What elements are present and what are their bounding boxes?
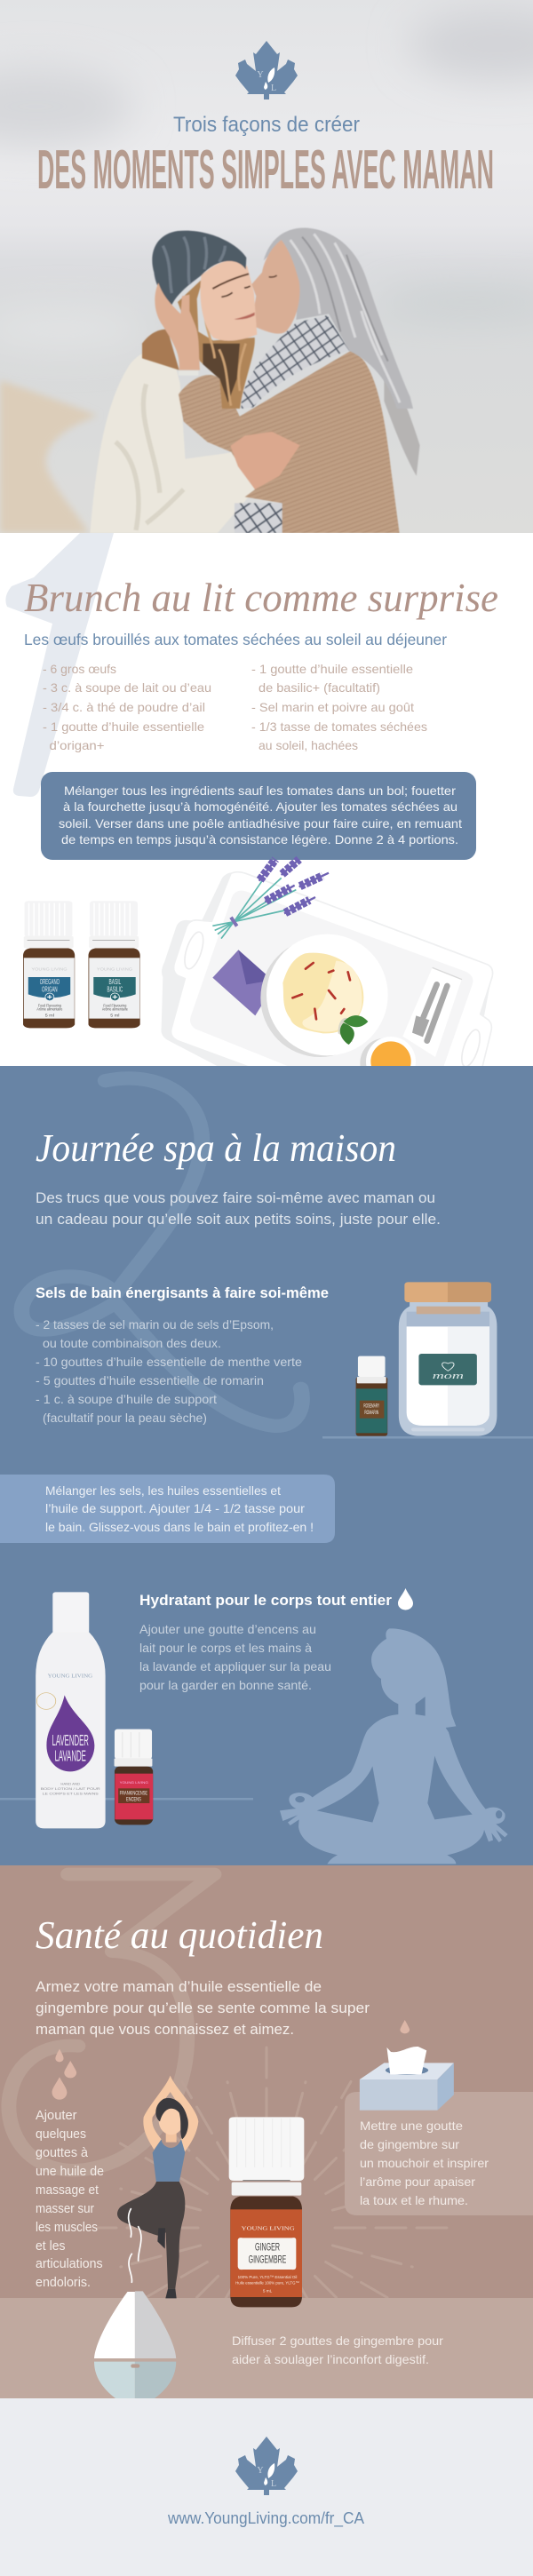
bath salt ingredients: - 2 tasses de sel marin ou de sels d’Epsom, <box>36 1317 274 1332</box>
watermark number 3 <box>9 1874 214 2170</box>
product: lavender lotion: LAVANDE <box>55 1747 86 1765</box>
product: ginger bottle <box>229 2117 304 2307</box>
subheading: moisturizer: Hydratant pour le corps tout entier <box>139 1592 392 1609</box>
icon: water drop <box>398 1588 413 1610</box>
logo: maple leaf top: L <box>271 83 276 93</box>
massage text <box>36 2109 104 2290</box>
shelf line <box>322 1436 533 1439</box>
product: lavender lotion: BODY LOTION / LAIT POUR <box>41 1786 100 1791</box>
website url: www.YoungLiving.com/fr_CA <box>167 2509 364 2528</box>
moisturizer text: la lavande et appliquer sur la peau <box>139 1659 331 1674</box>
ingredients right: de basilic+ (facultatif) <box>259 680 380 695</box>
moisturizer text: pour la garder en bonne santé. <box>139 1678 312 1692</box>
tissue text: l’arôme pour apaiser <box>360 2174 475 2189</box>
intro text <box>36 1979 370 2038</box>
logo: maple leaf top <box>235 41 298 99</box>
ingredients left: - 3 c. à soupe de lait ou d’eau <box>43 680 211 695</box>
silhouette: meditating woman <box>280 1628 508 1864</box>
tissue text <box>360 2119 489 2207</box>
ingredients right: - Sel marin et poivre au goût <box>251 700 414 714</box>
illustration: yoga woman <box>117 2076 198 2298</box>
panel: footer <box>0 2398 533 2576</box>
ingredients right: - 1 goutte d’huile essentielle <box>251 662 413 676</box>
massage text: gouttes à <box>36 2146 89 2160</box>
illustration: diffuser <box>94 2291 176 2398</box>
logo: maple leaf top: Y <box>257 70 264 80</box>
instructions box: Mélanger tous les ingrédients sauf les tomates dans un bol; fouetter <box>64 783 456 798</box>
diffuser text <box>232 2334 443 2366</box>
lavender bouquet <box>212 855 329 939</box>
ingredients left <box>43 662 211 752</box>
envelope <box>212 950 266 1016</box>
instructions box: bath salts <box>0 1475 335 1543</box>
panel: spa section <box>0 1066 533 1865</box>
product: oregano bottle: Arôme alimentaire <box>36 1007 63 1013</box>
tissue text: la toux et le rhume. <box>360 2193 468 2207</box>
diffuser text: aider à soulager l’inconfort digestif. <box>232 2352 429 2366</box>
intro text: Des trucs que vous pouvez faire soi-même avec maman ou <box>36 1190 435 1206</box>
ingredients right: au soleil, hachées <box>259 738 358 752</box>
photo: bodies <box>90 350 420 533</box>
product: rosemary bottle: ROSEMARY <box>363 1403 379 1410</box>
massage text: endoloris. <box>36 2276 91 2290</box>
product: basil bottle: 5 ml <box>110 1014 119 1019</box>
napkin and cutlery <box>402 967 462 1057</box>
massage text: Ajouter <box>36 2109 77 2123</box>
product: basil bottle: YOUNG LIVING <box>97 967 132 973</box>
ingredients left: - 1 goutte d’huile essentielle <box>43 720 204 734</box>
product: basil bottle: BASIL <box>108 978 121 986</box>
bath salt ingredients: - 10 gouttes d’huile essentielle de menthe verte <box>36 1355 302 1369</box>
product: oregano bottle: OREGANO <box>40 978 60 986</box>
intro text <box>36 1190 441 1228</box>
product: rosemary bottle <box>356 1356 387 1436</box>
tissue text: un mouchoir et inspirer <box>360 2156 489 2170</box>
sand beach <box>0 380 98 533</box>
massage text: massage et <box>36 2183 99 2198</box>
product: rosemary bottle: ROMARIN <box>364 1410 378 1416</box>
instructions box <box>41 772 476 860</box>
intro text: Armez votre maman d’huile essentielle de <box>36 1979 322 1995</box>
product: lavender lotion <box>36 1592 106 1828</box>
icon: tissue box <box>360 2047 454 2111</box>
intro text: un cadeau pour qu’elle soit aux petits soins, juste pour elle. <box>36 1212 441 1228</box>
product: ginger bottle: GINGER <box>255 2240 280 2253</box>
ingredients left: - 6 gros œufs <box>43 662 116 676</box>
lavender over box edge <box>260 859 299 880</box>
product: frankincense bottle <box>115 1729 153 1825</box>
diffuser text: Diffuser 2 gouttes de gingembre pour <box>232 2334 443 2348</box>
product: oregano bottle <box>23 901 75 1028</box>
product: oregano bottle: Food Flavouring <box>38 1004 61 1008</box>
heading: spa: Journée spa à la maison <box>36 1126 396 1170</box>
product: basil bottle: BASILIC <box>107 985 123 994</box>
ingredients left: d’origan+ <box>50 738 105 752</box>
heading: health: Santé au quotidien <box>36 1913 323 1957</box>
moisturizer text: Ajouter une goutte d’encens au <box>139 1622 316 1636</box>
photo: faces and hair <box>142 228 413 409</box>
bath salt ingredients: (facultatif pour la peau sèche) <box>43 1411 207 1425</box>
ingredients left: - 3/4 c. à thé de poudre d’ail <box>43 700 205 714</box>
intro text: maman que vous connaissez et aimez. <box>36 2022 294 2038</box>
product: ginger bottle: 5 mL <box>263 2288 273 2293</box>
icon: oil drops <box>52 2020 410 2100</box>
cup <box>360 1037 416 1066</box>
product: frankincense bottle: YOUNG LIVING <box>120 1780 149 1785</box>
logo: maple leaf bottom: L <box>271 2479 276 2489</box>
product: basil bottle: Food Flavouring <box>103 1004 127 1008</box>
product: oregano bottle: YOUNG LIVING <box>31 967 68 973</box>
product: ginger bottle: GINGEMBRE <box>249 2253 286 2265</box>
product: ginger bottle: 100% Pure, YLTG™ Essential Oil <box>238 2275 297 2279</box>
product: ginger bottle: Huile essentielle 100% pure, YLTG™ <box>235 2280 299 2285</box>
shelf line <box>0 1798 253 1800</box>
logo: maple leaf bottom <box>235 2437 298 2495</box>
massage text: quelques <box>36 2127 86 2142</box>
illustration: breakfast tray <box>162 860 494 1066</box>
illustration: salt jar <box>399 1282 497 1436</box>
plate with eggs <box>260 934 388 1057</box>
instructions box: à la fourchette jusqu’à homogénéité. Ajouter les tomates séchées au <box>63 799 457 814</box>
instructions box: de temps en temps jusqu’à consistance légère. Donne 2 à 4 portions. <box>61 832 458 847</box>
panel: brunch section <box>5 533 497 1066</box>
ingredients right: - 1/3 tasse de tomates séchées <box>251 720 427 734</box>
icon: diffuser steam <box>129 2209 141 2282</box>
massage text: articulations <box>36 2257 103 2271</box>
massage text: et les <box>36 2239 66 2254</box>
instructions box: bath salts: Mélanger les sels, les huiles essentielles et <box>45 1483 281 1498</box>
bath salt ingredients <box>36 1317 302 1425</box>
moisturizer text: lait pour le corps et les mains à <box>139 1641 312 1655</box>
product: lavender lotion: LE CORPS ET LES MAINS <box>43 1792 99 1795</box>
product: basil bottle <box>89 901 140 1028</box>
instructions box: soleil. Verser dans une poêle antiadhésive pour faire cuire, en remuant <box>59 816 462 831</box>
ingredients right <box>251 662 427 752</box>
subheading: bath salts: Sels de bain énergisants à faire soi-même <box>36 1285 329 1301</box>
bath salt ingredients: - 5 gouttes d’huile essentielle de romarin <box>36 1373 264 1387</box>
product: ginger bottle: YOUNG LIVING <box>242 2225 295 2231</box>
product: basil bottle: Arôme alimentaire <box>102 1007 128 1013</box>
tissue panel <box>345 2092 533 2215</box>
product: frankincense bottle: ENCENS <box>126 1797 141 1803</box>
decorative rays <box>96 2047 448 2298</box>
tissue text: de gingembre sur <box>360 2137 459 2151</box>
panel: daily health section <box>0 1865 533 2398</box>
logo: maple leaf bottom: Y <box>257 2466 264 2476</box>
product: lavender lotion: HAND AND <box>60 1782 80 1785</box>
massage text: les muscles <box>36 2221 98 2235</box>
tissue text: Mettre une goutte <box>360 2119 463 2133</box>
bath salt ingredients: ou toute combinaison des deux. <box>43 1336 221 1350</box>
watermark number 2 <box>21 1078 302 1426</box>
product: oregano bottle: 5 ml <box>45 1014 54 1019</box>
panel: hero photo <box>0 0 533 533</box>
product: lavender lotion: LAVENDER <box>52 1731 89 1750</box>
watermark number 1 <box>5 533 114 797</box>
product: oregano bottle: ORIGAN <box>42 985 58 994</box>
heading: brunch: Brunch au lit comme surprise <box>24 575 498 620</box>
subtitle: Trois façons de créer <box>173 113 360 137</box>
instructions box: bath salts: l’huile de support. Ajouter 1/4 - 1/2 tasse pour <box>45 1501 305 1515</box>
instructions box: bath salts: le bain. Glissez-vous dans le bain et profitez-en ! <box>45 1520 314 1534</box>
intro text: gingembre pour qu’elle se sente comme la super <box>36 2000 370 2016</box>
massage text: masser sur <box>36 2202 94 2216</box>
bath salt ingredients: - 1 c. à soupe d’huile de support <box>36 1392 217 1406</box>
product: frankincense bottle: FRANKINCENSE <box>120 1791 148 1797</box>
product: lavender lotion: YOUNG LIVING <box>48 1673 92 1680</box>
subheading: recipe: Les œufs brouillés aux tomates séchées au soleil au déjeuner <box>24 631 447 648</box>
moisturizer text <box>139 1622 331 1692</box>
massage text: une huile de <box>36 2165 104 2179</box>
illustration: salt jar: mom <box>433 1371 464 1381</box>
